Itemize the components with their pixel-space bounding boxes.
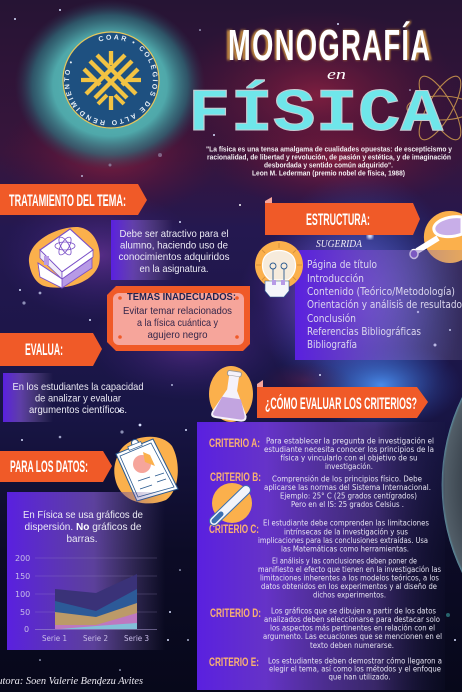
panel: criterios	[197, 422, 445, 690]
criterio C: las Matemáticas como herramientas.	[281, 544, 409, 554]
quote: Leon M. Lederman (premio nobel de física, 1988)	[252, 168, 406, 178]
criterio B: aplicarse las normas del Sistema Internacional.	[264, 483, 431, 492]
icon: clipboard	[114, 437, 178, 503]
icon: books	[29, 227, 100, 288]
text panel: tema atractivo: Debe ser atractivo para el	[120, 228, 228, 240]
panel: datos with chart	[7, 492, 165, 650]
subtitle: sugerida: SUGERIDA	[316, 238, 362, 250]
criterio A: estudiante necesita conocer los principios de la	[264, 445, 434, 454]
criterio A: investigación.	[325, 462, 373, 471]
criterio C	[209, 518, 441, 600]
criterio C: limitaciones inherentes a los modelos teóricos, a los	[260, 574, 439, 582]
criterio C: implicaciones para las conclusiones extraídas. Usa	[258, 536, 428, 545]
text panel: tema atractivo	[111, 220, 230, 280]
icon: flask	[209, 366, 253, 422]
banner: para los datos	[0, 451, 112, 482]
quote: racionalidad, de libertad y revolución, de pasión y estética, y de imaginación	[207, 152, 451, 162]
text: graficos de dispersion: En Física se usa gráficos de	[23, 509, 143, 521]
criterio D: los aspectos más pertinentes en relación con el	[270, 624, 435, 632]
criterio D: CRITERIO D:	[210, 608, 261, 620]
text: graficos de dispersion: barras.	[66, 533, 98, 545]
title: Física: FÍSICA	[188, 80, 443, 149]
quote	[206, 144, 452, 178]
text panel: evalua: de analizar y evaluar	[35, 392, 121, 404]
chart axis labels	[15, 554, 149, 643]
chart axis labels: Serie 2	[83, 634, 108, 643]
callout: temas inadecuados: agujero negro	[148, 329, 208, 341]
criterio C: manifiesto el efecto que tienen en la investigación las	[258, 565, 441, 574]
criterio E	[209, 656, 442, 682]
banner: tratamiento del tema: TRATAMIENTO DEL TEMA:	[9, 191, 126, 210]
chart axis labels: 100	[15, 590, 30, 599]
criterio B: Ejemplo: 25° C (25 grados centígrados)	[280, 492, 417, 500]
criterio D: texto deben numerarse.	[310, 641, 394, 650]
icon: thermometer	[212, 483, 252, 523]
text panel: evalua: argumentos científicos.	[29, 404, 127, 416]
banner: como evaluar los criterios	[257, 380, 428, 418]
criterio C: dichos experimentos.	[313, 590, 386, 600]
criterio C: El análisis y las conclusiones deben poner de	[272, 556, 417, 566]
logo with teal glow	[19, 4, 201, 168]
quote: desbordada y sentido común adquirido".	[264, 160, 393, 170]
atom graphic	[407, 71, 462, 145]
criterio D: Los gráficos que se dibujen a partir de los datos	[271, 606, 436, 616]
callout: temas inadecuados: a la física cuántica y	[137, 317, 219, 329]
text panel: tema atractivo: alumno, haciendo uso de	[120, 240, 228, 252]
criterio E: Los estudiantes deben demostrar cómo llegaron a	[268, 656, 442, 666]
text panel: tema atractivo: en la asignatura.	[140, 263, 208, 275]
criterio C: datos obtenidos en los experimentos y al diseño de	[261, 582, 437, 591]
text panel: estructura list	[295, 238, 462, 360]
chart axis labels: 0	[24, 625, 29, 634]
criterio B: Comprensión de los principios físico. Debe	[272, 474, 422, 484]
criterio C: El estudiante debe comprenden las limitaciones	[263, 518, 429, 528]
text panel: estructura list: Página de título	[307, 259, 377, 271]
criterio A: física y vincularlo con el objetivo de su	[280, 454, 418, 462]
criterio A	[209, 436, 434, 471]
chart axis labels: 50	[20, 608, 30, 617]
criterio D	[210, 606, 442, 650]
title: en: en	[327, 67, 346, 83]
area chart	[15, 554, 157, 643]
text: graficos de dispersion	[23, 509, 143, 545]
text panel: estructura list: Conclusión	[307, 313, 356, 325]
chart axis labels: Serie 3	[124, 634, 149, 643]
text panel: estructura list: Referencias Bibliográficas	[307, 326, 421, 338]
criterio A: CRITERIO A:	[209, 438, 260, 450]
icon: magnifying glass	[410, 211, 462, 263]
criterio C: intrínsecas de la investigación y sus	[284, 528, 408, 536]
banner: evalua	[0, 333, 102, 366]
criterio B	[210, 472, 431, 509]
text panel: estructura list: Introducción	[307, 273, 364, 285]
banner: estructura	[265, 197, 420, 235]
criterio E: CRITERIO E:	[209, 657, 259, 669]
text: graficos de dispersion: dispersión. No gráficos de	[24, 521, 142, 533]
chart axis labels: 150	[15, 572, 30, 581]
banner: estructura: ESTRUCTURA:	[306, 210, 370, 229]
banner: tratamiento del tema	[0, 184, 147, 215]
planet at right edge	[442, 397, 462, 573]
callout: temas inadecuados	[107, 286, 250, 351]
text panel: evalua	[3, 373, 144, 422]
text panel: estructura list: Bibliografía	[307, 339, 357, 351]
callout dots	[118, 296, 239, 339]
logo weave mark	[81, 51, 141, 110]
criterio D: argumento. Las ecuaciones que se mencionen en el	[263, 632, 442, 641]
logo ring text: COAR • COLEGIOS DE ALTO RENDIMIENTO •	[64, 34, 158, 126]
banner: para los datos: PARA LOS DATOS:	[10, 457, 88, 476]
criterio D: analizados deben seleccionarse para destacar solo	[264, 615, 440, 624]
text panel: tema atractivo: conocimientos adquiridos	[118, 251, 230, 263]
criterio C: CRITERIO C:	[209, 524, 259, 536]
criterio E: que han utilizado.	[328, 672, 390, 682]
criterio B: CRITERIO B:	[210, 472, 261, 484]
banner: evalua: EVALUA:	[25, 340, 63, 359]
criterio B: Pero en el IS: 25 grados Celsius .	[291, 500, 404, 509]
title: Monografía: MONOGRAFÍA	[228, 20, 430, 70]
chart axis labels: Serie 1	[42, 634, 67, 643]
title: Monografía: MONOGRAFÍA	[225, 20, 433, 70]
criterio A: Para establecer la pregunta de investigación el	[266, 436, 434, 446]
callout: temas inadecuados: Evitar temar relacionados	[123, 305, 232, 317]
callout: temas inadecuados: TEMAS INADECUADOS:	[127, 291, 236, 303]
icon: light bulb	[255, 241, 303, 297]
criterio E: elegir el tema, así como los métodos y el enfoque	[269, 664, 441, 674]
chart axis labels: 200	[15, 554, 30, 563]
text panel: evalua: En los estudiantes la capacidad	[12, 381, 144, 393]
